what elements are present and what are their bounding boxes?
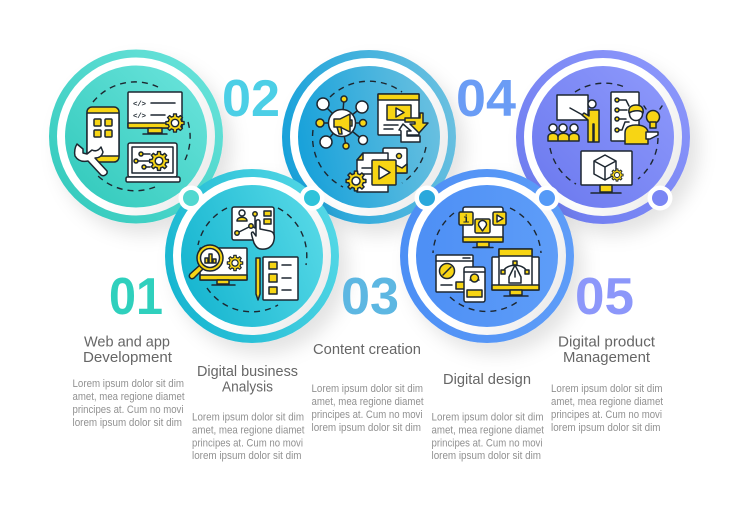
- heading: web and app development: Web and app: [84, 334, 170, 350]
- text block: digital design: amet, mea regione diamet: [432, 424, 544, 436]
- heading: content creation: Content creation: [313, 342, 421, 358]
- circle: content creation: [282, 50, 456, 224]
- text block: content creation: lorem ipsum dolor sit dim: [312, 422, 421, 434]
- circle: digital design: [400, 169, 574, 343]
- icon: manager with idea bulb: [611, 92, 662, 144]
- connector dot 4: [534, 186, 560, 210]
- icon: monitor with magnifier: [189, 245, 247, 285]
- heading: digital business analysis: Analysis: [222, 380, 273, 396]
- connector dot 2: [300, 186, 324, 210]
- heading: digital design: Digital design: [443, 372, 531, 388]
- number 04: 04: [456, 70, 516, 128]
- icon: code monitor: </>: [133, 101, 146, 109]
- text block: digital business analysis: lorem ipsum dolor sit dim: [192, 450, 302, 462]
- icon: pencil: [256, 258, 260, 300]
- text block: content creation: principes at. Cum no movi: [312, 409, 422, 421]
- connector dot 1: [178, 186, 204, 210]
- heading: digital business analysis: [197, 364, 298, 396]
- icon: laptop with gear: [126, 143, 180, 182]
- icon: monitor with 3d cube: [581, 151, 632, 193]
- text block: content creation: Lorem ipsum dolor sit dim: [312, 383, 423, 395]
- text block: digital product management: principes at. Cum no movi: [551, 409, 662, 421]
- icon: video browser window: [378, 94, 428, 142]
- text block: digital design: principes at. Cum no movi: [432, 438, 542, 450]
- icon: megaphone network: [316, 96, 368, 149]
- text block: digital business analysis: Lorem ipsum dolor sit dim: [192, 412, 304, 424]
- text block: digital business analysis: amet, mea regione diamet: [192, 424, 304, 436]
- circle: web and app development: [49, 50, 223, 224]
- text block: digital product management: lorem ipsum dolor sit dim: [551, 422, 660, 434]
- text block: digital design: Lorem ipsum dolor sit dim: [432, 412, 544, 424]
- text block: web and app development: principes at. Cum no movi: [72, 404, 184, 416]
- icon: smartphone with apps: [87, 107, 119, 162]
- text block: digital design: lorem ipsum dolor sit dim: [432, 450, 541, 462]
- heading: digital product management: Management: [563, 350, 650, 366]
- icon: monitor with info tiles: i: [463, 214, 470, 226]
- text block: content creation: amet, mea regione diamet: [312, 396, 424, 408]
- text block: digital design: [432, 412, 544, 462]
- text block: content creation: [312, 383, 424, 434]
- heading: web and app development: Development: [83, 350, 172, 366]
- text block: digital business analysis: [192, 412, 304, 462]
- text block: digital product management: amet, mea regione diamet: [551, 396, 663, 408]
- icon: presenter with audience: [548, 95, 599, 142]
- text block: web and app development: Lorem ipsum dolor sit dim: [72, 378, 184, 390]
- heading: web and app development: [83, 334, 172, 366]
- number 03: 03: [341, 268, 399, 326]
- icon: code monitor: [128, 92, 184, 134]
- connector dot 5: [648, 186, 672, 210]
- circle: digital product management: [516, 50, 690, 224]
- icon: monitor with info tiles: [459, 207, 506, 248]
- text block: digital product management: Lorem ipsum dolor sit dim: [551, 383, 662, 395]
- connector dot 3: [414, 186, 440, 210]
- text block: digital product management: [551, 383, 663, 434]
- text block: digital business analysis: principes at. Cum no movi: [192, 438, 303, 450]
- icon: monitor with pen tool: [492, 249, 539, 296]
- icon: wrench: [75, 144, 107, 176]
- number 02: 02: [222, 70, 280, 128]
- heading: digital product management: [558, 334, 655, 366]
- text block: web and app development: lorem ipsum dolor sit dim: [72, 417, 182, 429]
- icon: browser and phone layouts: [436, 255, 485, 302]
- heading: digital business analysis: Digital business: [197, 364, 298, 380]
- number 05: 05: [575, 268, 634, 326]
- circle: digital business analysis: [165, 169, 339, 343]
- heading: digital product management: Digital product: [558, 334, 655, 350]
- number 01: 01: [109, 268, 163, 326]
- icon: checklist: [263, 257, 298, 300]
- text block: web and app development: [72, 378, 184, 429]
- icon: analytics board with hand: [232, 207, 274, 249]
- icon: code monitor: </>: [133, 113, 146, 121]
- text block: web and app development: amet, mea regione diamet: [72, 391, 184, 403]
- icon: media files with gear: [346, 148, 407, 192]
